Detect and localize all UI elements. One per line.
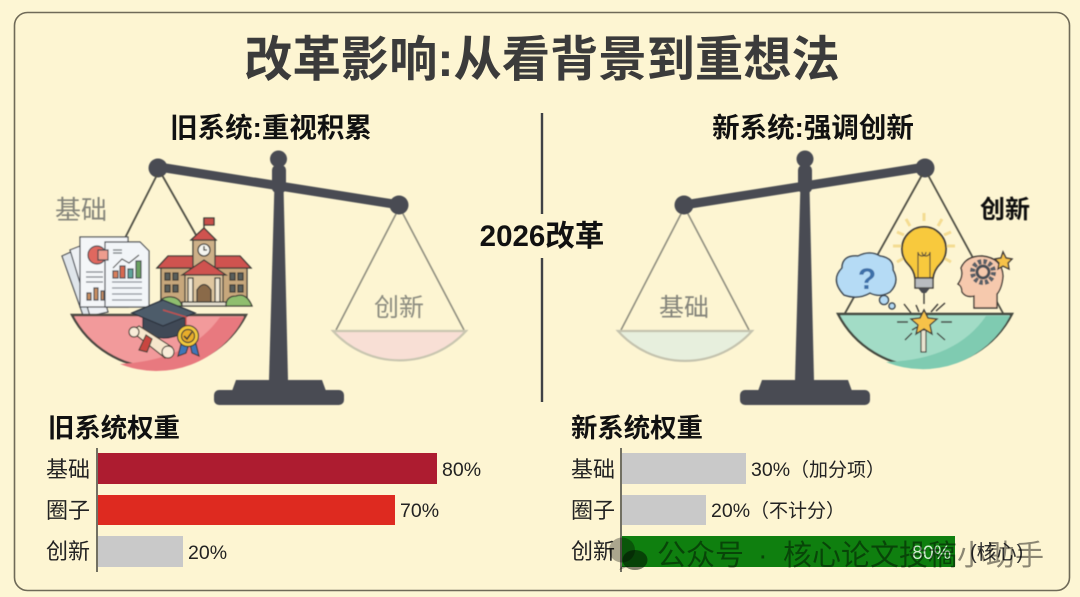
left pan: foundation, pink [72,315,246,371]
icon: report documents [62,237,149,318]
bar: innovation 20% [46,536,227,567]
faded left pan: foundation [618,212,752,361]
icon: wechat logo [609,538,648,570]
label: foundation: 基础 [55,195,107,225]
bar: innovation 80%: 80% [912,542,951,564]
bar: foundation 30% [571,453,885,484]
icon: graduation cap [132,300,195,338]
icon: head with gear [958,252,1012,308]
center divider [541,113,543,402]
bar: foundation 80%: 基础 [46,457,90,482]
bar chart: old system weights [46,413,481,572]
bar: circle 70%: 70% [400,500,439,522]
watermark text: 公众号 [657,540,744,572]
watermark [609,538,1044,572]
bar: foundation 80%: 80% [442,459,481,481]
left pan chains [124,175,196,240]
bar: innovation 80%: (核心) [970,541,1023,564]
tilted beam [674,150,934,214]
bar: circle 20%: 20%（不计分） [711,500,845,522]
icon: light bulb [893,213,955,304]
icon: diploma scroll [129,326,174,358]
scale post and base [214,165,344,405]
chart heading: 新系统权重 [571,413,703,443]
bar: innovation 80% [571,536,1023,567]
faded right pan: innovation [333,212,466,360]
axis [96,448,98,572]
watermark text: 核心论文投稿小助手 [783,539,1044,572]
faded left pan: foundation: 基础 [659,294,709,322]
bar: foundation 30%: 基础 [571,457,615,482]
center label: 2026 reform: 2026改革 [480,220,604,253]
title: 改革影响:从看背景到重想法 [244,33,840,87]
bar: circle 20%: 圈子 [571,498,615,523]
scale post and base [740,165,870,405]
bar: innovation 20%: 20% [188,542,227,564]
left balance scale [55,150,466,405]
bar: foundation 30%: 30%（加分项） [751,459,885,481]
bar: foundation 80% [46,453,481,484]
bar: circle 70% [46,495,439,525]
icon: question cloud [836,253,896,309]
bar: innovation 20%: 创新 [46,539,90,564]
heading: old system: 旧系统:重视积累 [170,112,372,143]
icon: magic wand star [897,303,952,352]
heading: new system: 新系统:强调创新 [712,112,914,143]
tilted beam [148,150,408,214]
right pan: innovation, green [838,314,1012,369]
faded right pan: innovation: 创新 [374,294,424,322]
watermark text: · [758,540,768,572]
bar: circle 20% [571,495,845,525]
label: innovation: 创新 [980,196,1030,224]
icon: award medal [178,326,199,356]
bar: innovation 80%: 创新 [571,539,615,564]
chart heading: 旧系统权重 [48,413,180,443]
bar chart: new system weights [571,413,1023,572]
icon: school building [157,218,252,306]
axis [620,448,622,572]
bar: circle 70%: 圈子 [46,498,90,523]
right pan chains [844,175,1004,315]
icon: question cloud: ? [858,263,876,296]
right balance scale [618,150,1030,405]
